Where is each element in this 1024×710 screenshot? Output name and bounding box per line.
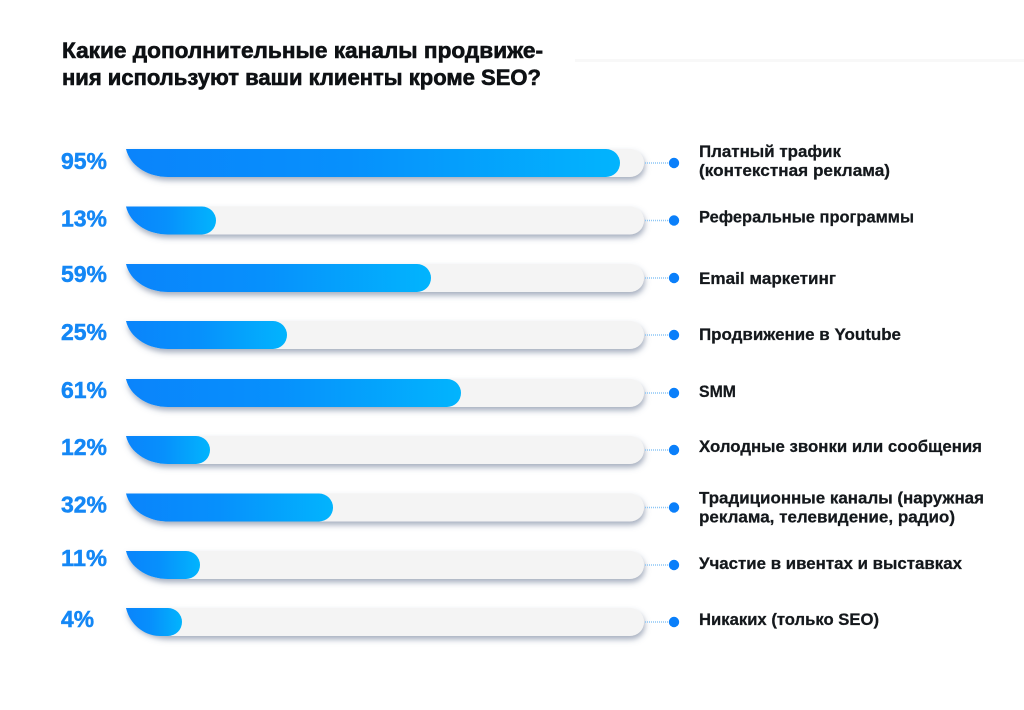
- row: Участие в ивентах и выставках 11%: [61, 545, 963, 579]
- row: Реферальные программы 13%: 13%: [61, 206, 107, 232]
- title: ния используют ваши клиенты кроме SEO?: [62, 65, 541, 90]
- row: Традиционные каналы 32%: реклама, телевидение, радио): [699, 508, 955, 526]
- row: Платный трафик 95%: 95%: [61, 148, 107, 174]
- row: Никаких (только SEO) 4%: Никаких (только SEO): [699, 611, 879, 629]
- row: SMM 61%: 61%: [61, 377, 107, 403]
- row: Холодные звонки или сообщения 12%: 12%: [61, 434, 107, 460]
- row: Продвижение в Youtube 25%: Продвижение в Youtube: [699, 326, 901, 344]
- row: Платный трафик 95%: Платный трафик: [699, 143, 842, 161]
- row: SMM 61%: SMM: [699, 383, 736, 401]
- row: Продвижение в Youtube 25%: [61, 319, 901, 349]
- row: Участие в ивентах и выставках 11%: 11%: [61, 545, 107, 571]
- row: SMM 61%: [61, 377, 736, 407]
- row: Реферальные программы 13%: [61, 206, 914, 234]
- row: Холодные звонки или сообщения 12%: Холодные звонки или сообщения: [699, 438, 982, 456]
- row: Традиционные каналы 32%: Традиционные каналы (наружная: [699, 490, 984, 508]
- row: Никаких (только SEO) 4%: [61, 606, 879, 636]
- row: Email маркетинг 59%: [61, 261, 836, 292]
- title: Какие дополнительные каналы продвиже-: [62, 38, 543, 63]
- row: Традиционные каналы 32%: 32%: [61, 492, 107, 518]
- row: Реферальные программы 13%: Реферальные программы: [699, 208, 914, 226]
- row: Холодные звонки или сообщения 12%: [61, 434, 982, 464]
- title: [62, 38, 543, 90]
- row: Платный трафик 95%: (контекстная реклама): [699, 162, 890, 180]
- row: Email маркетинг 59%: 59%: [61, 261, 107, 287]
- row: Платный трафик 95%: [61, 143, 890, 180]
- row: Никаких (только SEO) 4%: 4%: [61, 606, 94, 632]
- row: Email маркетинг 59%: Email маркетинг: [699, 270, 836, 288]
- row: Продвижение в Youtube 25%: 25%: [61, 319, 107, 345]
- row: Участие в ивентах и выставках 11%: Участие в ивентах и выставках: [699, 555, 963, 573]
- row: Традиционные каналы 32%: [61, 490, 984, 526]
